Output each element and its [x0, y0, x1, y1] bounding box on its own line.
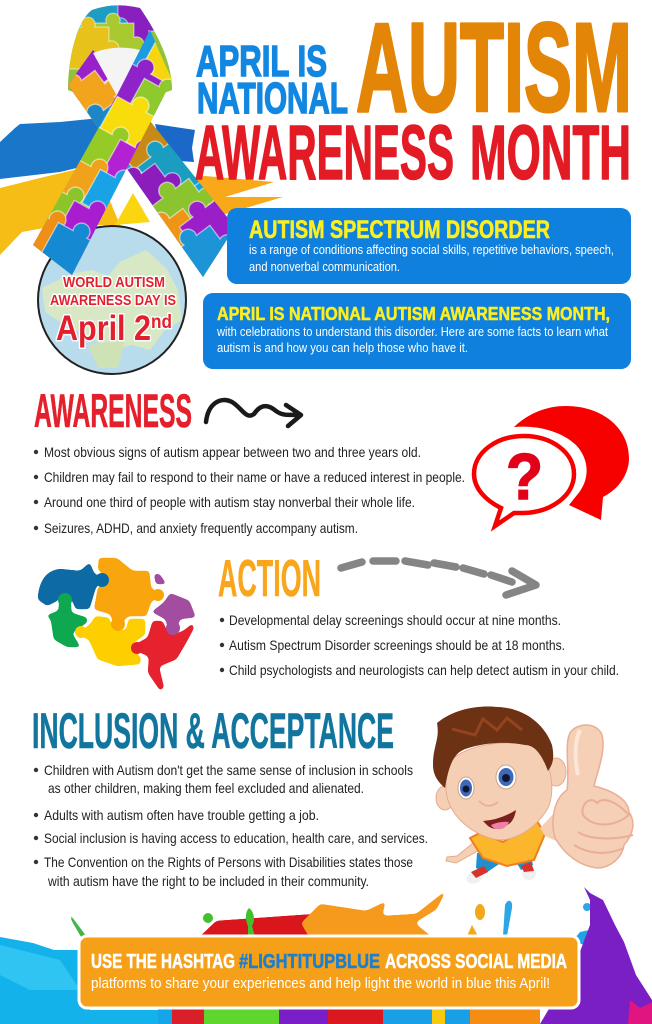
action bullet list: Autism Spectrum Disorder screenings should be at 18 months.: [229, 637, 565, 653]
icon: cartoon boy thumbs up: [433, 706, 633, 886]
inclusion bullet list: with autism have the right to be included in their community.: [47, 873, 369, 889]
panel: hashtag callout: ACROSS SOCIAL MEDIA: [385, 951, 567, 973]
badge text: AWARENESS DAY IS: [50, 292, 176, 309]
panel: april is national autism awareness month: autism is and how you can help those who have it.: [217, 340, 468, 355]
action bullet list: Developmental delay screenings should occur at nine months.: [229, 612, 561, 628]
icon: question speech bubbles: ?: [506, 440, 543, 513]
panel: hashtag callout: platforms to share your experiences and help light the world in blue this April!: [91, 975, 550, 992]
title: NATIONAL: [197, 74, 348, 123]
globe badge: [38, 226, 186, 374]
awareness bullet list: Most obvious signs of autism appear between two and three years old.: [44, 444, 421, 460]
badge text: [50, 274, 176, 348]
badge text: WORLD AUTISM: [63, 274, 165, 291]
inclusion bullet list: as other children, making them feel excluded and alienated.: [48, 780, 364, 796]
inclusion bullet list: Social inclusion is having access to education, health care, and services.: [44, 830, 428, 846]
panel: hashtag callout: USE THE HASHTAG: [91, 951, 235, 973]
badge text: April 2: [56, 309, 151, 348]
panel: april is national autism awareness month: [203, 293, 631, 369]
panel: autism spectrum disorder: [227, 208, 631, 284]
title: APRIL IS: [196, 37, 327, 86]
heading: awareness: AWARENESS: [34, 384, 192, 437]
arrow: dashed: [341, 561, 536, 595]
panel: april is national autism awareness month: APRIL IS NATIONAL AUTISM AWARENESS MONTH,: [217, 304, 610, 324]
panel: autism spectrum disorder: AUTISM SPECTRUM DISORDER: [249, 216, 550, 244]
inclusion bullet list: The Convention on the Rights of Persons with Disabilities states those: [44, 854, 413, 870]
icon: puzzle brain: [37, 557, 197, 692]
icon: question speech bubbles: [474, 406, 629, 526]
arrow: squiggle: [206, 400, 301, 426]
awareness bullet list: [34, 444, 465, 536]
panel: hashtag callout: #LIGHTITUPBLUE: [239, 951, 380, 973]
badge text: nd: [151, 312, 172, 333]
icon: puzzle awareness ribbon: [33, 5, 228, 277]
awareness bullet list: Around one third of people with autism stay nonverbal their whole life.: [44, 494, 415, 510]
inclusion bullet list: Adults with autism often have trouble getting a job.: [44, 807, 319, 823]
inclusion bullet list: Children with Autism don't get the same sense of inclusion in schools: [44, 762, 413, 778]
paint splash: [0, 887, 652, 1024]
panel: autism spectrum disorder: and nonverbal communication.: [249, 259, 400, 274]
brush strokes behind ribbon: [0, 118, 283, 255]
action bullet list: [220, 612, 619, 678]
heading: action: ACTION: [218, 550, 321, 608]
awareness bullet list: Children may fail to respond to their name or have a reduced interest in people.: [44, 469, 465, 485]
panel: hashtag callout: [79, 936, 579, 1008]
title: [195, 0, 632, 196]
awareness bullet list: Seizures, ADHD, and anxiety frequently accompany autism.: [44, 520, 358, 536]
inclusion bullet list: [34, 762, 428, 889]
